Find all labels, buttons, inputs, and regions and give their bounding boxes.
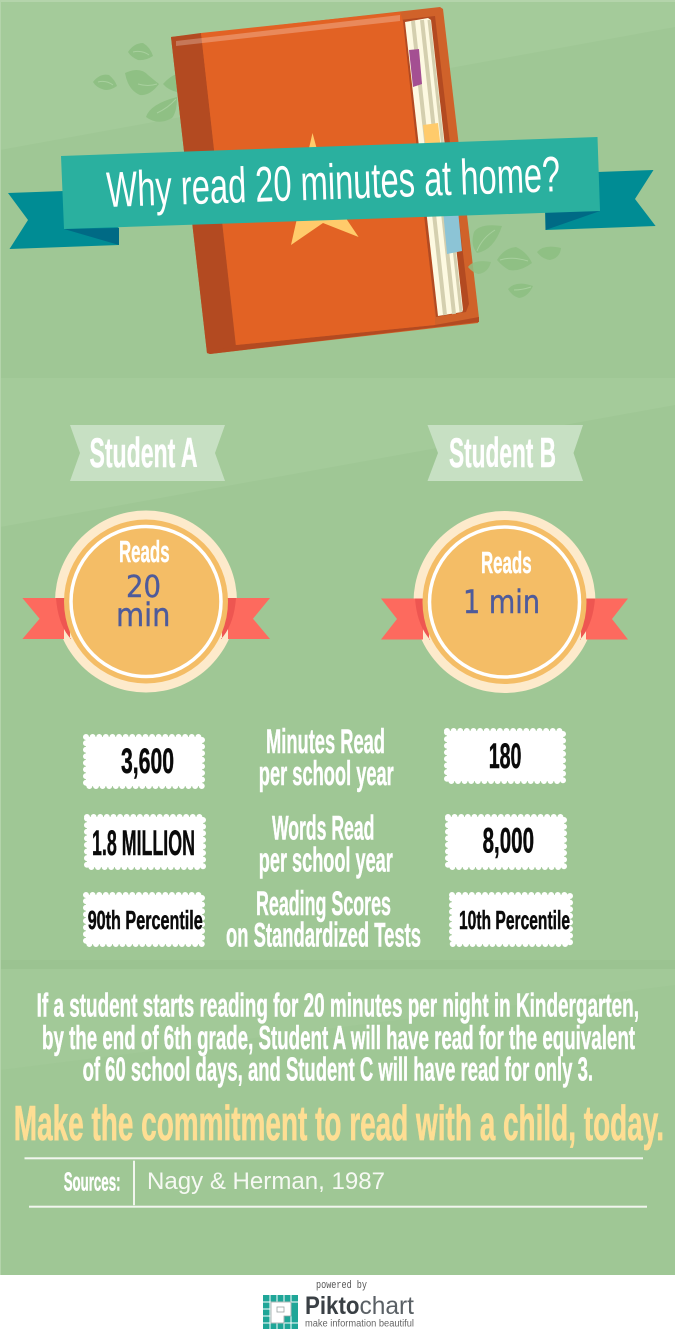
stat: 90th percentile: 90th Percentile bbox=[88, 905, 203, 935]
label: words read: Words Read bbox=[272, 809, 374, 847]
book bottom edge bbox=[207, 317, 479, 354]
piktochart wordmark: Pikto bbox=[305, 1292, 360, 1320]
sources table bbox=[24, 1157, 647, 1208]
stat: 10th percentile bbox=[452, 895, 570, 944]
powered by: powered by bbox=[316, 1280, 367, 1292]
ribbon band bbox=[61, 137, 600, 229]
ribbon right fold bbox=[546, 211, 600, 230]
stat: 90th percentile bbox=[86, 895, 203, 944]
label: reading scores: Reading Scores bbox=[256, 885, 391, 923]
tagline: make information beautiful bbox=[305, 1319, 414, 1330]
title ribbon bbox=[8, 137, 656, 249]
stat: 180: 180 bbox=[489, 737, 522, 776]
student A tag bbox=[70, 425, 225, 481]
leaves left of book bbox=[93, 43, 177, 122]
badge: student A: Reads bbox=[119, 534, 170, 569]
ribbon left fold bbox=[64, 228, 119, 245]
book spine bbox=[171, 33, 236, 353]
book highlight bbox=[176, 15, 400, 46]
badge: student A: min bbox=[116, 596, 170, 634]
badge: student B: 1 min bbox=[463, 583, 540, 621]
paragraph bbox=[37, 987, 639, 1088]
badge: student A bbox=[22, 510, 270, 692]
book front cover bbox=[201, 12, 435, 345]
student B tag bbox=[428, 425, 583, 481]
label: minutes read: Minutes Read bbox=[266, 723, 385, 761]
stat: 8,000 bbox=[448, 817, 564, 867]
stat: 1.8 million: 1.8 MILLION bbox=[92, 824, 195, 863]
ribbon left tail bbox=[8, 191, 119, 249]
leaves right of book bbox=[468, 225, 561, 298]
bookmark tabs bbox=[409, 49, 462, 254]
badge: student A: 20 bbox=[126, 570, 161, 605]
footer bbox=[0, 1275, 675, 1336]
stat: 10th percentile: 10th Percentile bbox=[459, 905, 570, 935]
piktochart logo icon bbox=[263, 1295, 298, 1329]
stat: 8,000: 8,000 bbox=[483, 822, 534, 861]
stat: 3,600 bbox=[86, 737, 202, 786]
label: minutes read bbox=[259, 723, 394, 793]
student A tag: Student A bbox=[90, 429, 198, 476]
book pages bbox=[405, 18, 463, 316]
label: words read: per school year bbox=[259, 842, 393, 880]
badge: student B bbox=[381, 511, 628, 693]
stat: 3,600: 3,600 bbox=[121, 742, 174, 781]
label: reading scores: on Standardized Tests bbox=[226, 917, 421, 955]
stat: 180 bbox=[447, 731, 563, 781]
ribbon right tail bbox=[545, 170, 656, 230]
label: reading scores bbox=[226, 885, 421, 955]
label: words read bbox=[259, 809, 393, 880]
badge: student B: Reads bbox=[481, 545, 532, 580]
sources label: Sources: bbox=[64, 1167, 120, 1197]
book inner edge bbox=[400, 16, 469, 317]
book back cover bbox=[171, 7, 479, 354]
stat: 1.8 million bbox=[87, 817, 203, 867]
label: minutes read: per school year bbox=[259, 755, 394, 793]
source citation: Nagy & Herman, 1987 bbox=[147, 1168, 385, 1195]
piktochart wordmark end: chart bbox=[360, 1292, 414, 1320]
book bbox=[171, 7, 479, 354]
student B tag: Student B bbox=[449, 429, 556, 476]
star on cover bbox=[258, 133, 378, 245]
